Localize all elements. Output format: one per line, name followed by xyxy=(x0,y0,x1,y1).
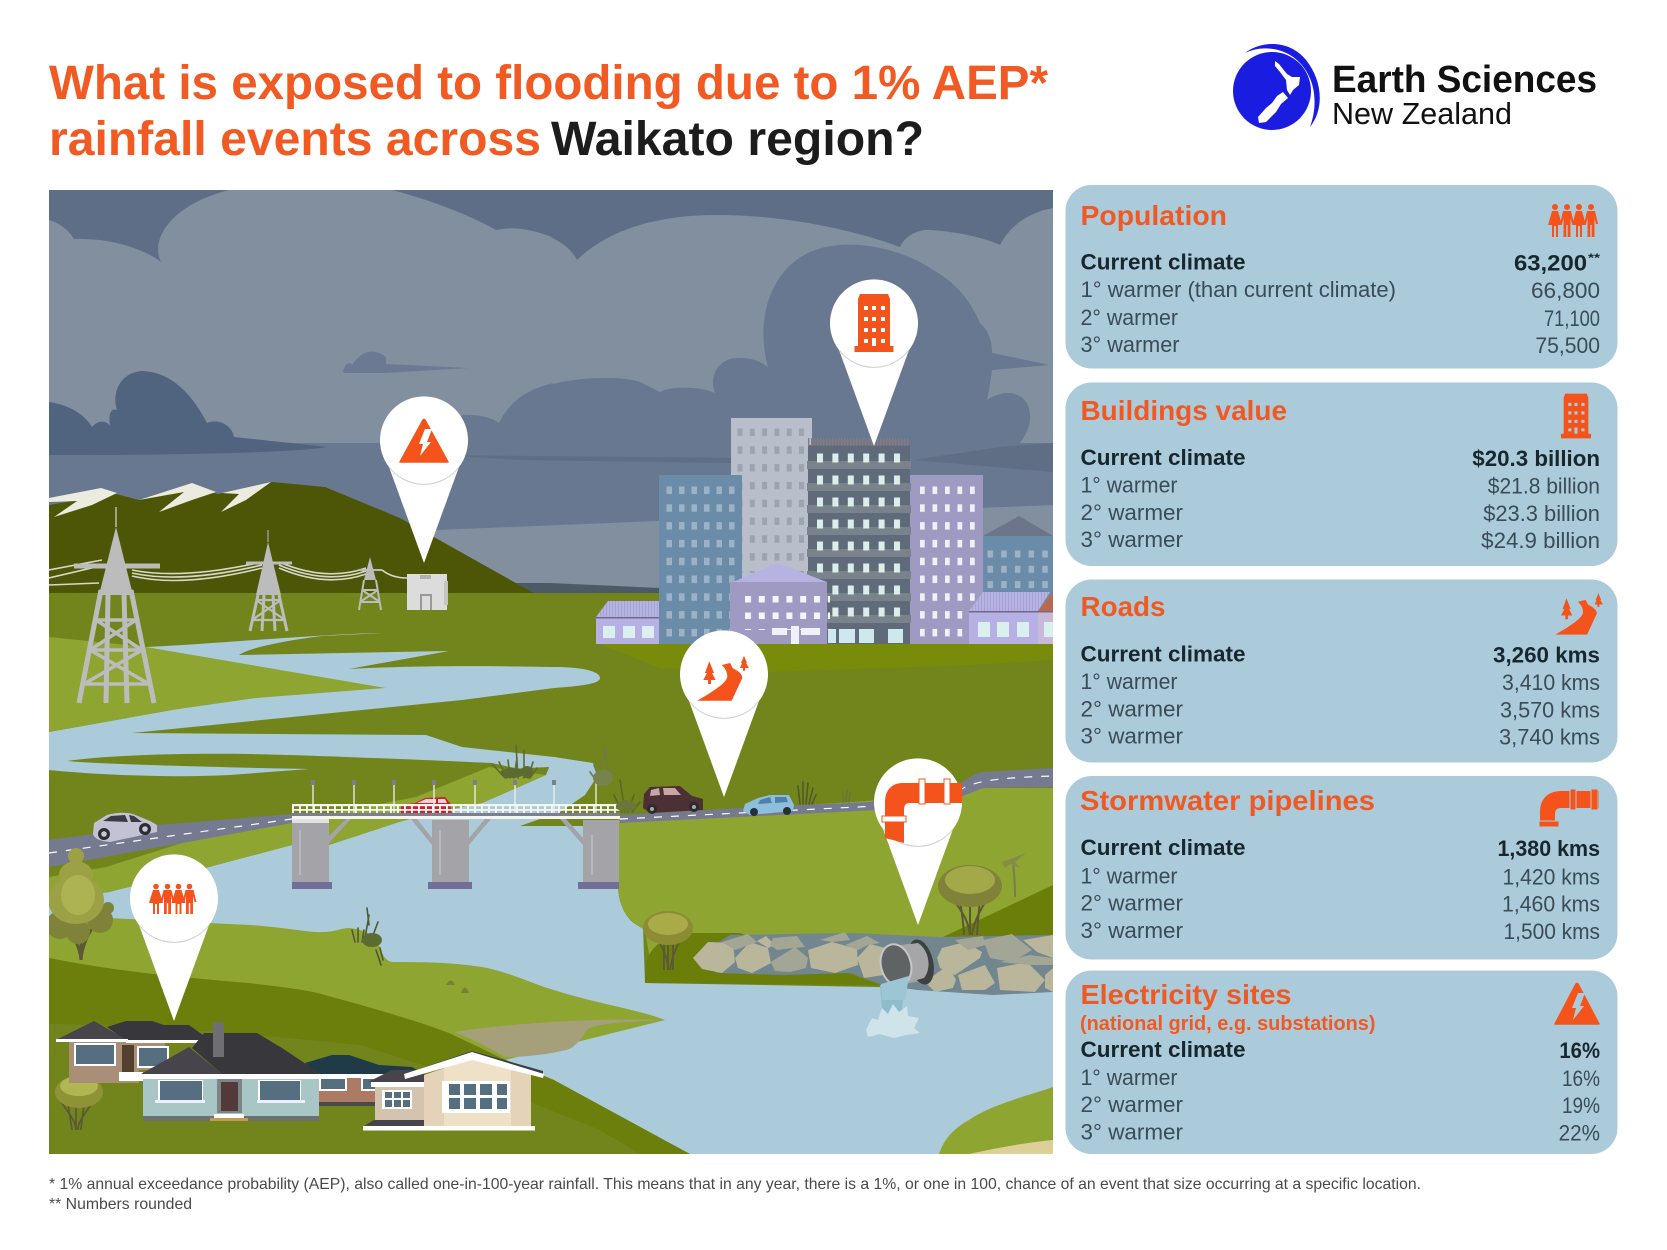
bottom right corner hill xyxy=(939,1087,1053,1154)
data rows: 3,570 kms xyxy=(1500,698,1600,722)
dark hill right xyxy=(943,885,1053,940)
heading: Stormwater pipelines xyxy=(1080,785,1375,816)
data rows: 2° warmer xyxy=(1080,696,1183,722)
data rows: 1,380 kms xyxy=(1498,836,1600,861)
lower left hill xyxy=(49,917,690,1154)
data rows: 3,260 kms xyxy=(1493,642,1600,668)
footnotes: * 1% annual exceedance probability (AEP), also called one-in-100-year rainfall. This means that in any year, there is a 1%, or one in 100, chance of an event that size occurring at a specific location. xyxy=(49,1176,1421,1193)
pylon large xyxy=(74,507,160,703)
panel: electricity sites xyxy=(1066,970,1618,1154)
sand bank xyxy=(454,1020,665,1057)
buildings xyxy=(596,418,1053,644)
data rows: $24.9 billion xyxy=(1481,528,1600,553)
rock wall xyxy=(693,932,1053,995)
red car xyxy=(401,797,452,814)
silver car xyxy=(93,813,157,842)
heading: Buildings value xyxy=(1080,395,1287,426)
sky xyxy=(49,190,1053,600)
pylon small xyxy=(358,557,382,610)
pylon middle xyxy=(246,530,292,631)
logo: Earth Sciences New Zealand: New Zealand xyxy=(1332,96,1512,131)
blue car xyxy=(743,795,794,816)
brown car xyxy=(643,786,703,814)
title: Waikato region? xyxy=(551,113,924,166)
bridge railing xyxy=(292,804,620,823)
green ground xyxy=(49,593,1053,988)
pin: population xyxy=(130,854,218,1021)
lamp posts xyxy=(313,783,596,815)
panel: buildings value xyxy=(1066,382,1618,566)
data rows: 1° warmer (than current climate) xyxy=(1080,277,1396,302)
footnotes: ** Numbers rounded xyxy=(49,1196,192,1213)
house: cream right xyxy=(363,1051,544,1130)
lake and lower river xyxy=(49,757,1053,1154)
outfall pipe and water xyxy=(866,937,938,1038)
dark shore under rocks xyxy=(645,933,880,985)
data rows: 71,100 xyxy=(1544,306,1600,331)
pin: buildings xyxy=(830,279,918,446)
heading: Electricity sites xyxy=(1080,979,1292,1010)
upper river xyxy=(49,633,600,790)
data rows: 2° warmer xyxy=(1080,500,1183,525)
house: back left xyxy=(56,1021,210,1083)
data rows: 16% xyxy=(1562,1066,1600,1091)
data rows: 63,200 xyxy=(1514,250,1587,276)
foreground hill xyxy=(49,958,690,1154)
data rows: 1° warmer xyxy=(1080,864,1178,888)
illustrated flood scene xyxy=(46,190,1053,1154)
tree: by houses xyxy=(55,1076,103,1130)
footnotes xyxy=(49,1176,1421,1213)
light green river bank along road xyxy=(49,767,546,900)
data rows: 1,500 kms xyxy=(1504,919,1600,944)
building: blue block xyxy=(659,475,742,644)
data rows: Current climate xyxy=(1080,1037,1246,1062)
data rows: 2° warmer xyxy=(1080,1092,1183,1117)
building: grey tower xyxy=(731,418,812,578)
dark green wedge right of bridge xyxy=(520,812,560,826)
data rows: 3° warmer xyxy=(1080,527,1183,552)
data rows: 22% xyxy=(1559,1120,1600,1146)
power pylons and wires xyxy=(49,507,407,703)
icon: road xyxy=(1555,593,1603,635)
building: right low block xyxy=(969,592,1053,644)
heading: Population xyxy=(1080,200,1227,231)
icon: electricity warning xyxy=(1555,984,1599,1024)
bridge piers xyxy=(292,819,619,882)
reeds along the river xyxy=(352,745,850,965)
data rows: 3° warmer xyxy=(1080,724,1183,748)
tree: right of pipe xyxy=(938,853,1026,935)
icon: pipe xyxy=(1539,789,1599,827)
heading: Roads xyxy=(1080,591,1166,622)
data rows: $20.3 billion xyxy=(1472,446,1600,471)
building: left low block xyxy=(596,601,659,644)
data rows: $21.8 billion xyxy=(1488,474,1600,498)
data rows: 1° warmer xyxy=(1080,669,1178,694)
building: centre purple house xyxy=(730,563,830,644)
data rows: Current climate xyxy=(1080,642,1246,666)
data rows: 2° warmer xyxy=(1080,890,1183,916)
data rows: 19% xyxy=(1562,1093,1600,1118)
data rows: 2° warmer xyxy=(1080,305,1178,330)
data rows: 3,410 kms xyxy=(1502,670,1600,695)
house: brick behind xyxy=(305,1055,426,1106)
data rows: 3° warmer xyxy=(1080,1120,1183,1144)
data rows: 1,420 kms xyxy=(1502,864,1600,890)
data rows: Current climate xyxy=(1080,835,1246,860)
data rows: Current climate xyxy=(1080,445,1246,470)
tree: left xyxy=(46,848,114,960)
logo: Earth Sciences New Zealand: Earth Sciences xyxy=(1332,59,1597,101)
dark island and left ground xyxy=(49,754,516,790)
data rows: 1° warmer xyxy=(1080,472,1178,498)
data rows xyxy=(1080,250,1600,358)
subheading: (national grid, e.g. substations) xyxy=(1080,1012,1376,1035)
data rows: 16% xyxy=(1559,1038,1600,1063)
road xyxy=(49,768,1053,867)
title: rainfall events across xyxy=(49,113,541,166)
right field xyxy=(618,788,1053,960)
data rows: 3° warmer xyxy=(1080,918,1183,943)
bridge xyxy=(292,780,620,889)
building: right blue block xyxy=(983,516,1053,611)
building: purple block xyxy=(910,475,983,644)
panel: roads xyxy=(1066,580,1618,762)
panel: population xyxy=(1066,185,1618,368)
data rows: 1° warmer xyxy=(1080,1065,1178,1090)
data rows: 75,500 xyxy=(1535,333,1600,358)
data rows: 66,800 xyxy=(1531,278,1600,303)
small tussocks xyxy=(446,980,469,993)
data rows: 3° warmer xyxy=(1080,332,1180,357)
icon: building xyxy=(1561,394,1591,438)
house: blue centre xyxy=(141,1022,326,1121)
data rows xyxy=(1080,642,1600,750)
data rows: ** xyxy=(1588,251,1600,265)
data rows: 1,460 kms xyxy=(1502,892,1600,916)
tree: by shore xyxy=(643,911,693,970)
mountain with snow xyxy=(49,482,539,596)
pin: stormwater pipe xyxy=(874,758,962,925)
pin: electricity xyxy=(380,396,468,563)
panel: stormwater pipelines xyxy=(1066,776,1618,960)
data rows: 3,740 kms xyxy=(1499,724,1600,750)
data rows xyxy=(1080,835,1600,944)
light green field left xyxy=(49,637,386,732)
building: dark apartment tower xyxy=(807,438,911,644)
title xyxy=(49,57,1048,166)
data rows: $23.3 billion xyxy=(1483,501,1600,526)
title: What is exposed to flooding due to 1% AEP* xyxy=(49,57,1048,110)
substation xyxy=(407,574,448,610)
data rows xyxy=(1080,445,1600,553)
wires xyxy=(49,560,407,585)
pin: roads xyxy=(680,630,768,797)
data rows: Current climate xyxy=(1080,250,1246,274)
data rows xyxy=(1080,1037,1600,1146)
icon: people xyxy=(1548,204,1598,237)
logo: Earth Sciences New Zealand xyxy=(1233,44,1597,131)
